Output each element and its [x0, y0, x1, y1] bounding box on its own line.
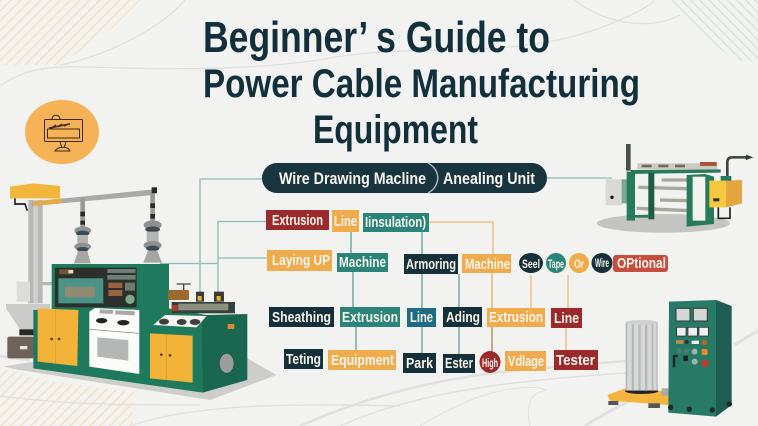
- label: insulation: Iinsulation): [365, 214, 426, 231]
- label: Tester: Tester: [556, 352, 595, 369]
- label: Ester: Ester: [445, 355, 473, 372]
- label: Wire: Wire: [595, 256, 609, 270]
- label: Line blue: [407, 308, 436, 327]
- pill: wire drawing machine and annealing unit: Anealing Unit: [443, 169, 535, 188]
- label: Armoring: Armoring: [406, 256, 456, 273]
- label: Or: [569, 253, 589, 273]
- label: Extrusion teal: Extrusion: [342, 309, 398, 326]
- label: Laying UP: [267, 250, 332, 271]
- label: Line: Line: [334, 213, 357, 230]
- label: Armoring: [404, 254, 458, 274]
- label: Extrusion: [266, 210, 329, 230]
- icon: monitor badge: [25, 100, 99, 164]
- label: Seel: Seel: [522, 257, 540, 271]
- illustration: extrusion machine: [3, 183, 277, 400]
- label: Wire: [592, 253, 612, 273]
- label: Equipment: Equipment: [331, 352, 394, 369]
- label: Sheathing: Sheathing: [272, 309, 331, 326]
- label: Extrusion: Extrusion: [272, 212, 323, 229]
- label: Line blue: Line: [410, 309, 433, 326]
- illustration: high voltage tester: [607, 300, 732, 417]
- label: Voltage: Vdlage: [508, 353, 544, 370]
- label: Extrusion orange: Extrusion: [489, 309, 543, 326]
- title: Power Cable Manufacturing: [203, 62, 640, 106]
- label: Laying UP: Laying UP: [272, 252, 330, 269]
- label: Line: [332, 210, 359, 232]
- label: Testing: Teting: [286, 351, 321, 368]
- pill: wire drawing machine and annealing unit: [262, 163, 547, 193]
- label: Voltage: [505, 351, 546, 371]
- label: Line red: Line: [554, 310, 579, 327]
- label: Machine orange: Machine: [465, 256, 510, 273]
- label: Seel: [519, 253, 543, 273]
- illustration: annealing unit: [597, 144, 753, 233]
- connector lines: [160, 178, 612, 354]
- label: Or: Or: [574, 257, 584, 271]
- label: Machine teal: Machine: [339, 254, 386, 271]
- label: Optional: OPtional: [617, 255, 666, 272]
- label: Machine orange: [462, 254, 511, 273]
- label: Ester: [443, 354, 475, 373]
- label: Tape: [546, 253, 566, 273]
- label: Ading: [443, 307, 482, 327]
- label: High: [480, 351, 500, 373]
- label: High: High: [482, 356, 498, 370]
- label: Park: Park: [406, 355, 434, 372]
- label: Ading: Ading: [446, 309, 480, 326]
- title: [203, 13, 640, 152]
- label: Tape: Tape: [548, 257, 564, 271]
- pill: wire drawing machine and annealing unit: Wire Drawing Macline: [279, 169, 426, 188]
- title: Equipment: [313, 108, 478, 152]
- title: Beginner’ s Guide to: [203, 13, 550, 62]
